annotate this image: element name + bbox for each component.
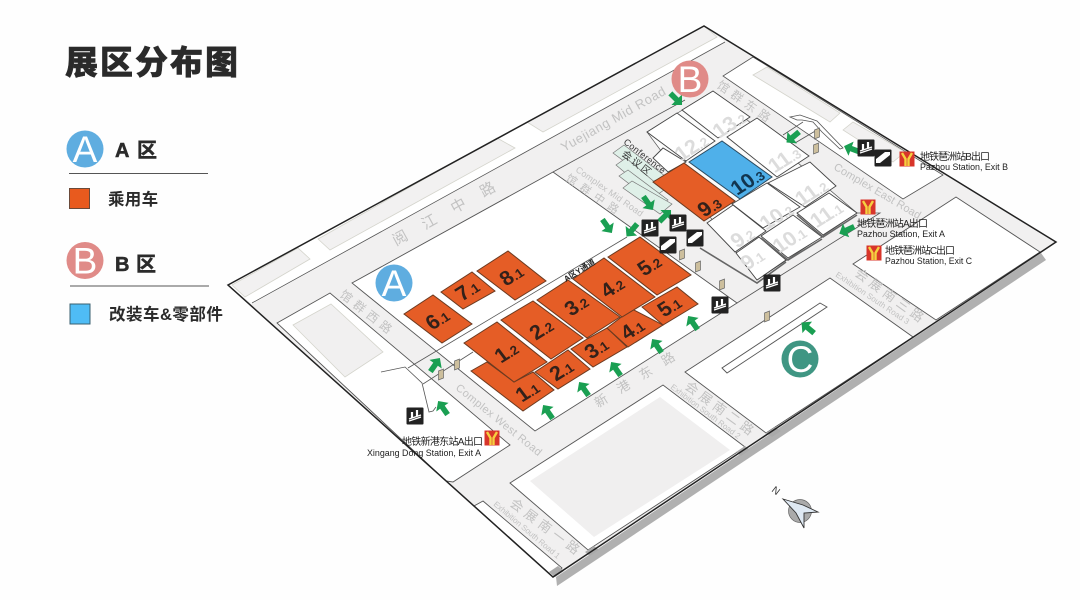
legend: orange swatch: [70, 188, 90, 208]
hall numbers orange: 4.1: [616, 314, 649, 345]
white B zone halls: [647, 91, 857, 280]
legend: [66, 129, 223, 324]
hall block base: [647, 91, 857, 280]
road: Complex Mid chinese: 馆群中路: [563, 171, 622, 217]
zone badge A: [376, 263, 412, 304]
exit label C: [885, 244, 972, 266]
site base with roads: [228, 26, 1056, 577]
road: Exhibition South Road 1: Exhibition South Road 1: [492, 500, 562, 561]
site outline: [228, 26, 1056, 577]
hall numbers orange: 7.1: [451, 275, 484, 306]
conference area: [613, 145, 672, 214]
hall numbers orange: 8.1: [495, 260, 528, 291]
legend: zone A heading: A: [115, 140, 129, 162]
legend: zone A badge: [66, 129, 104, 170]
hall numbers grey: 13.2: [708, 106, 751, 143]
hall numbers grey: 9.1: [736, 244, 769, 275]
exit label Xingang Dong: [367, 435, 483, 458]
legend: passenger cars label: 乘用车: [108, 189, 158, 209]
hall 9.3 orange: [653, 163, 735, 221]
road: Exhibition South Road 2: Exhibition South Road 2: [669, 382, 743, 441]
top strip right: [527, 26, 717, 132]
entrance columns: [438, 128, 820, 380]
compass: [769, 485, 818, 528]
road: Complex East chinese: 馆群东路: [714, 77, 774, 125]
exit label A: 地铁琶洲站A出口: [857, 217, 928, 230]
legend: zone B heading: B: [115, 254, 129, 276]
bottom block: [510, 385, 745, 550]
hall numbers orange: 6.1: [421, 304, 454, 335]
hall numbers orange: 9.3: [693, 191, 726, 222]
hall numbers grey: 10.1: [768, 221, 811, 258]
west parking lot: [293, 304, 383, 377]
zone C slot: [722, 303, 827, 373]
road: Complex West chinese: 馆群西路: [337, 287, 395, 337]
road: Complex West Road: Complex West Road: [453, 382, 544, 459]
hall numbers grey: 12.2: [670, 129, 713, 166]
conference label english: Conference: [622, 137, 667, 175]
south east block: [853, 197, 1040, 320]
exit label B: [920, 150, 1008, 172]
hall numbers grey: 10.2: [755, 198, 798, 235]
bottom grey lot: [530, 397, 730, 537]
road: Exhibition South Road 3 chinese: 会展南三路: [852, 265, 927, 325]
top margin: [228, 26, 725, 304]
hall base dark edges: [700, 215, 857, 283]
Yuejiang road edge lines: [252, 42, 880, 303]
hall numbers orange: 4.2: [596, 272, 629, 303]
hall numbers grey: 11.3: [764, 142, 806, 178]
exit label A: [857, 217, 945, 239]
top strip left: [232, 248, 310, 297]
road: Complex East Road: Complex East Road: [831, 161, 923, 222]
hall numbers orange: 1.1: [511, 376, 544, 407]
stair icons: [406, 140, 874, 424]
hall numbers grey: [670, 106, 848, 275]
zone badge B: B: [678, 59, 702, 100]
legend: zone A badge: A: [73, 129, 98, 170]
conference label chinese: 会议区: [619, 147, 656, 180]
exit label B: 地铁琶洲站B出口: [920, 150, 990, 163]
exit label C: 地铁琶洲站C出口: [885, 244, 955, 257]
hall numbers grey: 11.1: [806, 197, 848, 233]
legend: zone B heading: 区: [136, 254, 156, 276]
green entry arrows: [424, 88, 862, 423]
top strip middle: [318, 138, 515, 250]
hall numbers orange: 3.2: [560, 290, 593, 321]
hall numbers orange: 5.1: [653, 291, 686, 322]
road: Exhibition South Road 2 chinese: 会展南二路: [682, 378, 757, 438]
exit label A: Pazhou Station, Exit A: [857, 229, 945, 239]
road names: [337, 77, 927, 561]
road: Exhibition South Road 1 chinese: 会展南一路: [507, 495, 583, 557]
exit label B: Pazhou Station, Exit B: [920, 162, 1008, 172]
hall numbers grey: 9.2: [726, 222, 759, 253]
road: Complex Mid Road: Complex Mid Road: [574, 164, 645, 219]
west parking block: [277, 293, 510, 482]
ground shadow band: [556, 253, 1046, 586]
hall 10.3 blue: [689, 141, 772, 199]
south west corner block: [474, 501, 562, 577]
hall numbers orange: 3.1: [580, 333, 613, 364]
hall numbers orange: 10.3: [726, 163, 769, 200]
exit label C: Pazhou Station, Exit C: [885, 256, 972, 266]
orange A zone halls: [404, 237, 698, 411]
road: Xingang chinese: 新港东路: [592, 349, 678, 411]
legend: zone A heading: 区: [137, 140, 157, 162]
compass: N: [769, 485, 782, 498]
legend: zone B badge: B: [73, 240, 97, 282]
road: Yuejiang chinese: 阅江中路: [390, 179, 499, 249]
zone badge B: [672, 59, 708, 100]
upper right block: [723, 57, 943, 199]
legend: zone B badge: [66, 240, 104, 282]
hall numbers orange: 5.2: [633, 250, 666, 281]
hall numbers grey: 11.2: [791, 175, 833, 211]
legend: modified cars and parts label: 改装车&零部件: [109, 304, 223, 324]
zone A block: [352, 172, 737, 431]
A zone passage label: A区Y通道: [562, 257, 597, 284]
escalator icons: [660, 150, 892, 254]
zone C block: [685, 278, 913, 433]
zone badge C: C: [787, 339, 813, 380]
hall numbers orange: 2.1: [545, 355, 578, 386]
road end caps: [549, 427, 781, 577]
legend: blue swatch: [70, 304, 90, 324]
exit label Xingang Dong: Xingang Dong Station, Exit A: [367, 448, 481, 458]
zone badge A: A: [382, 263, 407, 304]
upper right grey lots: [753, 67, 905, 162]
road: Exhibition South Road 3: Exhibition South Road 3: [834, 270, 911, 327]
hall numbers orange: [421, 163, 769, 407]
metro icons: [484, 152, 914, 446]
hall numbers orange: 1.2: [490, 337, 523, 368]
exit label Xingang Dong: 地铁新港东站A出口: [402, 435, 483, 448]
hall numbers orange: 2.2: [525, 314, 558, 345]
A zone passage lines: [381, 115, 843, 412]
title: 展区分布图: [65, 44, 240, 81]
road: Yuejiang Mid Road: Yuejiang Mid Road: [558, 83, 668, 155]
site map: [228, 26, 1056, 586]
